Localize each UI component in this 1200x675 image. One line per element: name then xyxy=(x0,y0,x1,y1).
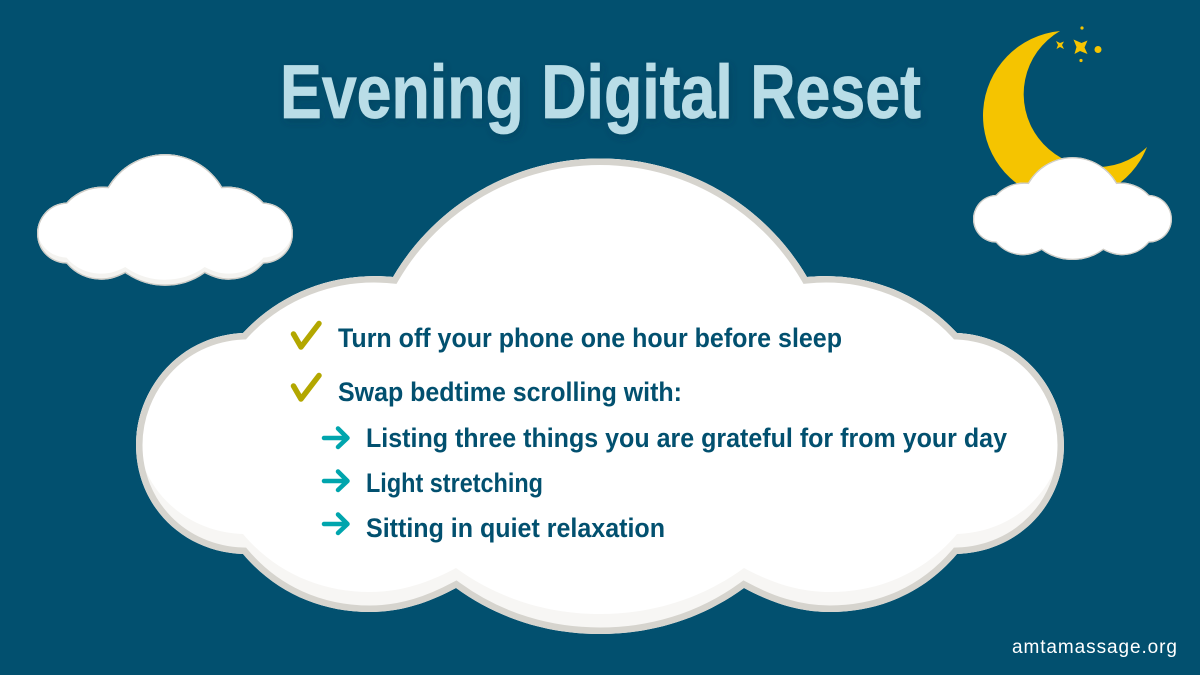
text: turn off phone: Turn off your phone one hour before sleep xyxy=(338,323,842,353)
small cloud over moon xyxy=(973,157,1172,260)
panel: large cloud xyxy=(136,158,1064,634)
text: listing three things: Listing three things you are grateful for from your day xyxy=(366,423,1007,453)
small cloud left xyxy=(37,154,293,286)
icon: check mark 2 xyxy=(294,376,319,399)
icon: crescent moon with stars xyxy=(983,26,1147,201)
icon: arrow 1 xyxy=(324,428,348,447)
icon: check mark 1 xyxy=(294,324,319,347)
title: Evening Digital Reset xyxy=(280,50,921,135)
text: sitting in quiet relaxation: Sitting in quiet relaxation xyxy=(366,513,665,543)
text: swap bedtime scrolling: Swap bedtime scrolling with: xyxy=(338,377,682,407)
text: light stretching: Light stretching xyxy=(366,468,543,498)
icon: arrow 2 xyxy=(324,472,348,490)
footer: website: amtamassage.org xyxy=(1012,637,1177,658)
icon: arrow 3 xyxy=(324,514,348,533)
